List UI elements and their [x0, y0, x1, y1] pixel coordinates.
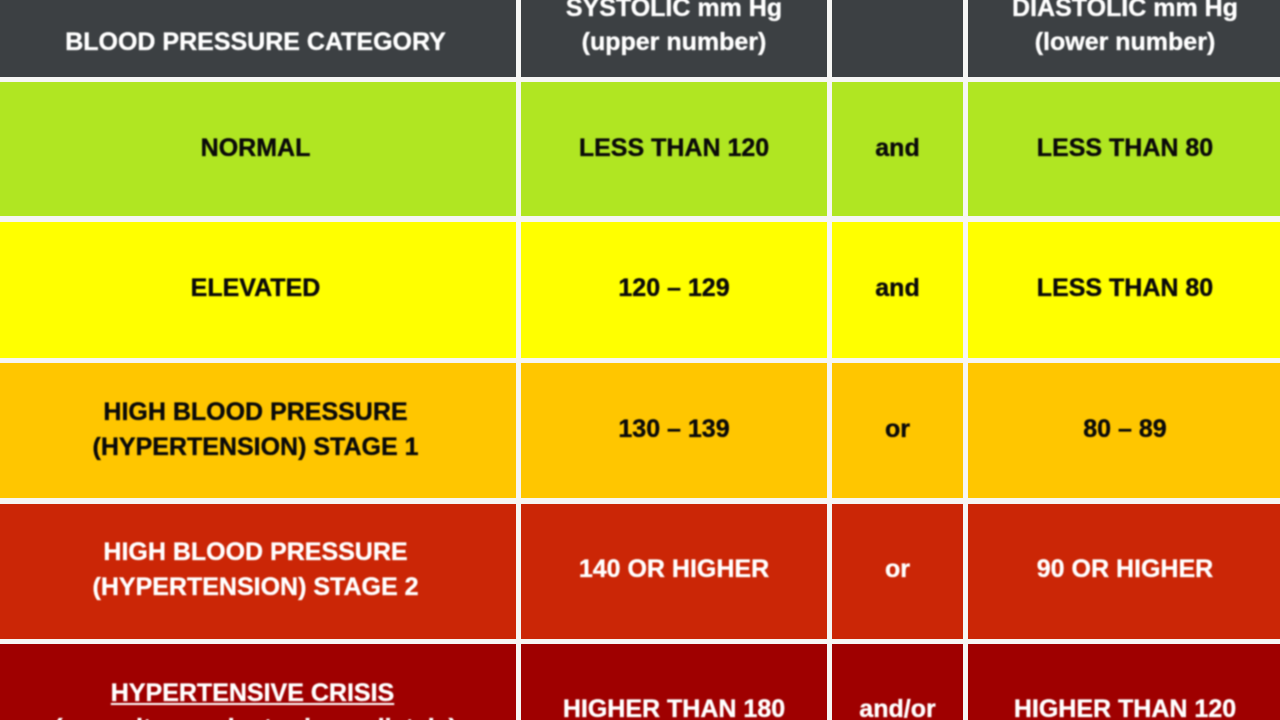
row: normal category [0, 82, 516, 216]
normal diastolic [968, 82, 1280, 216]
elevated connector [832, 222, 963, 358]
crisis connector [832, 644, 963, 720]
stage 1 systolic: 130 – 139 [618, 415, 730, 443]
stage 2 systolic [521, 504, 827, 639]
elevated systolic [521, 222, 827, 358]
row: stage 1 category: (HYPERTENSION) STAGE 1 [93, 433, 418, 461]
row: hypertensive crisis category [0, 644, 516, 720]
header: diastolic [968, 0, 1280, 77]
normal connector: and [875, 134, 920, 162]
header: systolic: (upper number) [582, 28, 766, 56]
header: empty connector column [832, 0, 963, 77]
elevated diastolic: LESS THAN 80 [1037, 274, 1213, 302]
stage 2 systolic: 140 OR HIGHER [579, 555, 769, 583]
stage 1 connector [832, 363, 963, 498]
row: normal category: NORMAL [201, 134, 310, 162]
elevated systolic: 120 – 129 [618, 274, 730, 302]
header: systolic [521, 0, 827, 77]
row: stage 2 category: (HYPERTENSION) STAGE 2 [93, 573, 418, 601]
header: blood pressure category: BLOOD PRESSURE CATEGORY [65, 28, 446, 56]
header: diastolic: (lower number) [1035, 28, 1215, 56]
normal systolic [521, 82, 827, 216]
elevated diastolic [968, 222, 1280, 358]
row: stage 1 category [0, 363, 516, 498]
header: blood pressure category [0, 0, 516, 77]
stage 1 connector: or [885, 415, 910, 443]
row: hypertensive crisis category: HYPERTENSIVE CRISIS [111, 679, 394, 707]
row: elevated category: ELEVATED [191, 274, 320, 302]
row: elevated category [0, 222, 516, 358]
stage 1 systolic [521, 363, 827, 498]
stage 1 diastolic [968, 363, 1280, 498]
normal diastolic: LESS THAN 80 [1037, 134, 1213, 162]
row: stage 1 category: HIGH BLOOD PRESSURE [103, 398, 408, 426]
crisis diastolic [968, 644, 1280, 720]
row: stage 2 category [0, 504, 516, 639]
normal connector [832, 82, 963, 216]
crisis systolic [521, 644, 827, 720]
stage 1 diastolic: 80 – 89 [1083, 415, 1167, 443]
normal systolic: LESS THAN 120 [579, 134, 769, 162]
stage 2 connector: or [885, 555, 910, 583]
row: stage 2 category: HIGH BLOOD PRESSURE [103, 538, 408, 566]
stage 2 diastolic: 90 OR HIGHER [1037, 555, 1213, 583]
elevated connector: and [875, 274, 920, 302]
stage 2 diastolic [968, 504, 1280, 639]
stage 2 connector [832, 504, 963, 639]
